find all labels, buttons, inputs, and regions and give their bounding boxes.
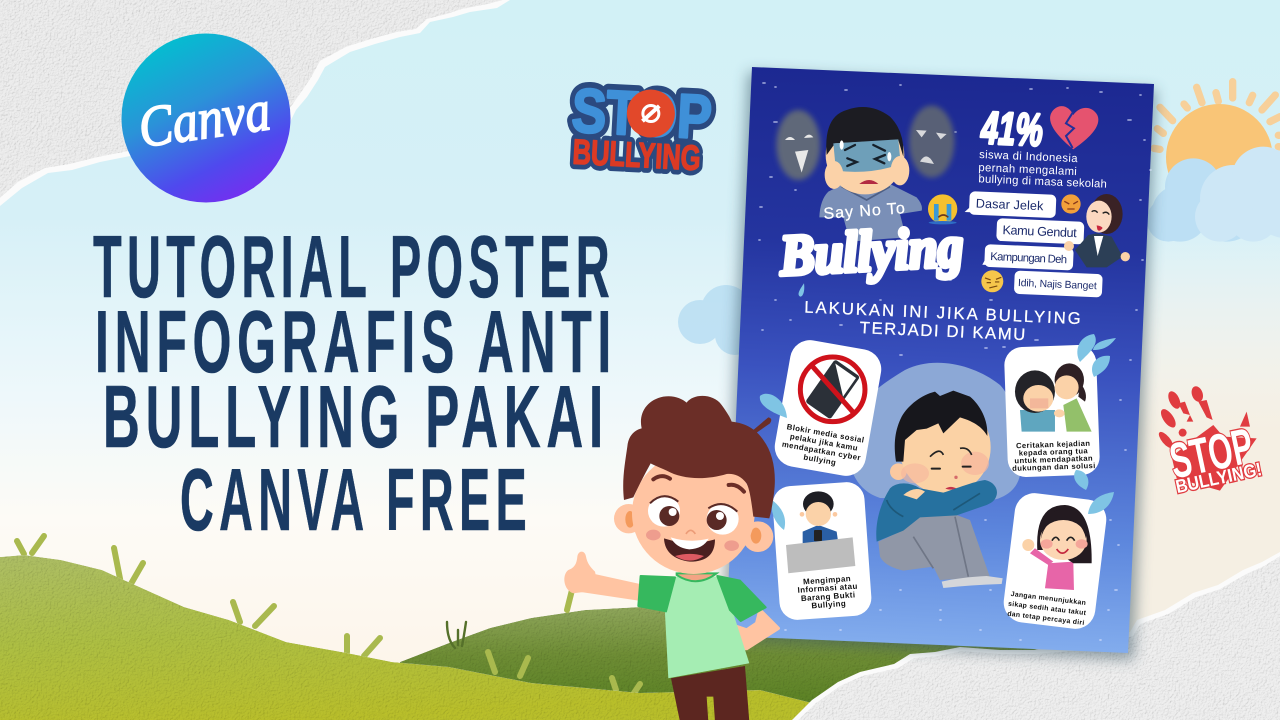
icon: broken heart	[1050, 106, 1098, 149]
card: tell parents	[1004, 344, 1100, 478]
icon: smiling woman waving	[1022, 505, 1092, 590]
poster shadow	[722, 72, 1156, 660]
icon: boy with phone behind desk	[786, 491, 855, 573]
title: TUTORIAL POSTER	[93, 217, 615, 316]
water drops: top right	[1077, 334, 1116, 377]
sticker word BULLYING: BULLYING	[572, 133, 702, 178]
mouth	[664, 537, 715, 562]
icon: angry emoji	[1061, 194, 1081, 214]
eyes	[648, 495, 739, 535]
right arm and hand	[720, 610, 778, 649]
neck	[677, 573, 717, 581]
text: Say No To: Say No To	[823, 200, 906, 223]
speech bubble: Dasar Jelek	[965, 191, 1056, 218]
icon: cloud	[1147, 147, 1280, 242]
card: stay confident: Jangan menunjukkan	[1010, 591, 1086, 607]
trousers	[671, 666, 749, 720]
torn paper: right cream	[1120, 235, 1280, 635]
icon: mocking woman	[1064, 194, 1130, 267]
card: block social media	[772, 337, 884, 479]
shirt	[665, 577, 749, 678]
card: save evidence: Barang Bukti	[801, 590, 856, 603]
speech bubble: Dasar Jelek: Dasar Jelek	[976, 196, 1044, 213]
card: tell parents: untuk mendapatkan	[1014, 454, 1093, 465]
panel: poster	[726, 67, 1154, 653]
icon: scared boy	[819, 107, 922, 242]
card: stay confident: sikap sedih atau takut	[1008, 601, 1087, 617]
speech bubble: Kamu Gendut	[996, 218, 1084, 244]
card: block social media: mendapatkan cyber	[781, 440, 862, 462]
card: tell parents: kepada orang tua	[1019, 446, 1089, 458]
heading: Lakukan ini jika bullying	[804, 298, 1081, 344]
hill: dark green back	[400, 590, 1040, 720]
stat description: bullying di masa sekolah	[978, 173, 1108, 191]
card: block social media: pelaku jika kamu	[789, 432, 859, 453]
speech bubble: Idih, Najis Banget: Idih, Najis Banget	[1018, 278, 1097, 292]
character: thumbs-up boy	[564, 396, 778, 720]
sticker word BULLYING: BULLYING	[572, 133, 702, 178]
cheeks and nose	[646, 530, 739, 551]
card: block social media: Blokir media sosial	[786, 422, 865, 445]
logo: Canva: Canva	[134, 77, 274, 160]
card: save evidence	[771, 481, 873, 621]
icon: red hand Stop Bullying: BULLYING!	[1174, 458, 1264, 497]
card: tell parents: dukungan dan solusi	[1012, 461, 1096, 473]
top-section art	[776, 101, 1130, 344]
stat description: pernah mengalami	[978, 162, 1078, 178]
water drop	[799, 283, 804, 297]
torn paper: bottom grey	[792, 552, 1280, 720]
hair	[623, 396, 775, 518]
stat description	[978, 149, 1108, 191]
speech bubble: Kampungan Deh	[982, 244, 1074, 270]
sticker no-entry circle	[626, 88, 676, 139]
heading: Lakukan ini jika bullying: LAKUKAN INI JIKA BULLYING	[804, 298, 1081, 328]
face	[627, 448, 760, 579]
sticker word BULLYING	[572, 133, 702, 178]
sticker: Stop Bullying	[569, 76, 714, 179]
icon: red hand Stop Bullying	[1156, 385, 1264, 497]
card: stay confident: dan tetap percaya diri	[1007, 611, 1085, 627]
torn paper: top left grey	[0, 0, 510, 206]
title: INFOGRAFIS ANTI	[95, 292, 617, 391]
water drops: bottom right	[1074, 470, 1114, 514]
speech bubble: Idih, Najis Banget	[1014, 270, 1103, 297]
sleeves	[638, 576, 766, 621]
card: save evidence: Mengimpan	[803, 574, 851, 586]
logo: Canva	[122, 34, 290, 202]
icon: unamused emoji	[981, 270, 1003, 292]
text: Bullying: Bullying	[778, 215, 965, 288]
icon: sad boy	[876, 391, 1003, 588]
icon: sun behind cloud	[1147, 82, 1280, 242]
icon: right ghost	[909, 106, 954, 178]
icon: no phone	[800, 357, 865, 422]
speech bubble: Kamu Gendut: Kamu Gendut	[1002, 223, 1078, 240]
icon: blue blob	[848, 363, 1020, 502]
sticker word STOP: STOP	[570, 76, 714, 153]
icon: left ghost	[776, 110, 820, 180]
stat: 41%: 41%	[980, 101, 1044, 156]
icon: crying emoji	[928, 194, 957, 224]
card: save evidence: Informasi atau	[797, 582, 858, 595]
title: BULLYING PAKAI	[103, 367, 609, 466]
title	[93, 217, 617, 549]
ears	[614, 504, 773, 552]
icon: two women comforting	[1015, 363, 1092, 432]
left arm with thumb	[564, 552, 640, 601]
heading: Lakukan ini jika bullying: TERJADI DI KAMU	[859, 318, 1026, 344]
speech bubble: Kampungan Deh: Kampungan Deh	[990, 251, 1068, 266]
pale cloud behind poster	[678, 285, 755, 355]
stat description: siswa di Indonesia	[979, 149, 1079, 165]
card: save evidence: Bullying	[811, 599, 846, 610]
hill: light green front	[0, 555, 880, 720]
grass: light tufts on hill	[17, 536, 640, 696]
title: CANVA FREE	[180, 450, 532, 549]
card: stay confident	[1001, 491, 1109, 631]
card: tell parents: Ceritakan kejadian	[1016, 439, 1090, 450]
card: block social media: bullying	[803, 453, 837, 467]
grass: dark tufts	[447, 622, 466, 648]
speckles	[745, 83, 1151, 640]
water drops: left	[760, 394, 787, 530]
sticker word STOP: STOP	[570, 76, 714, 153]
